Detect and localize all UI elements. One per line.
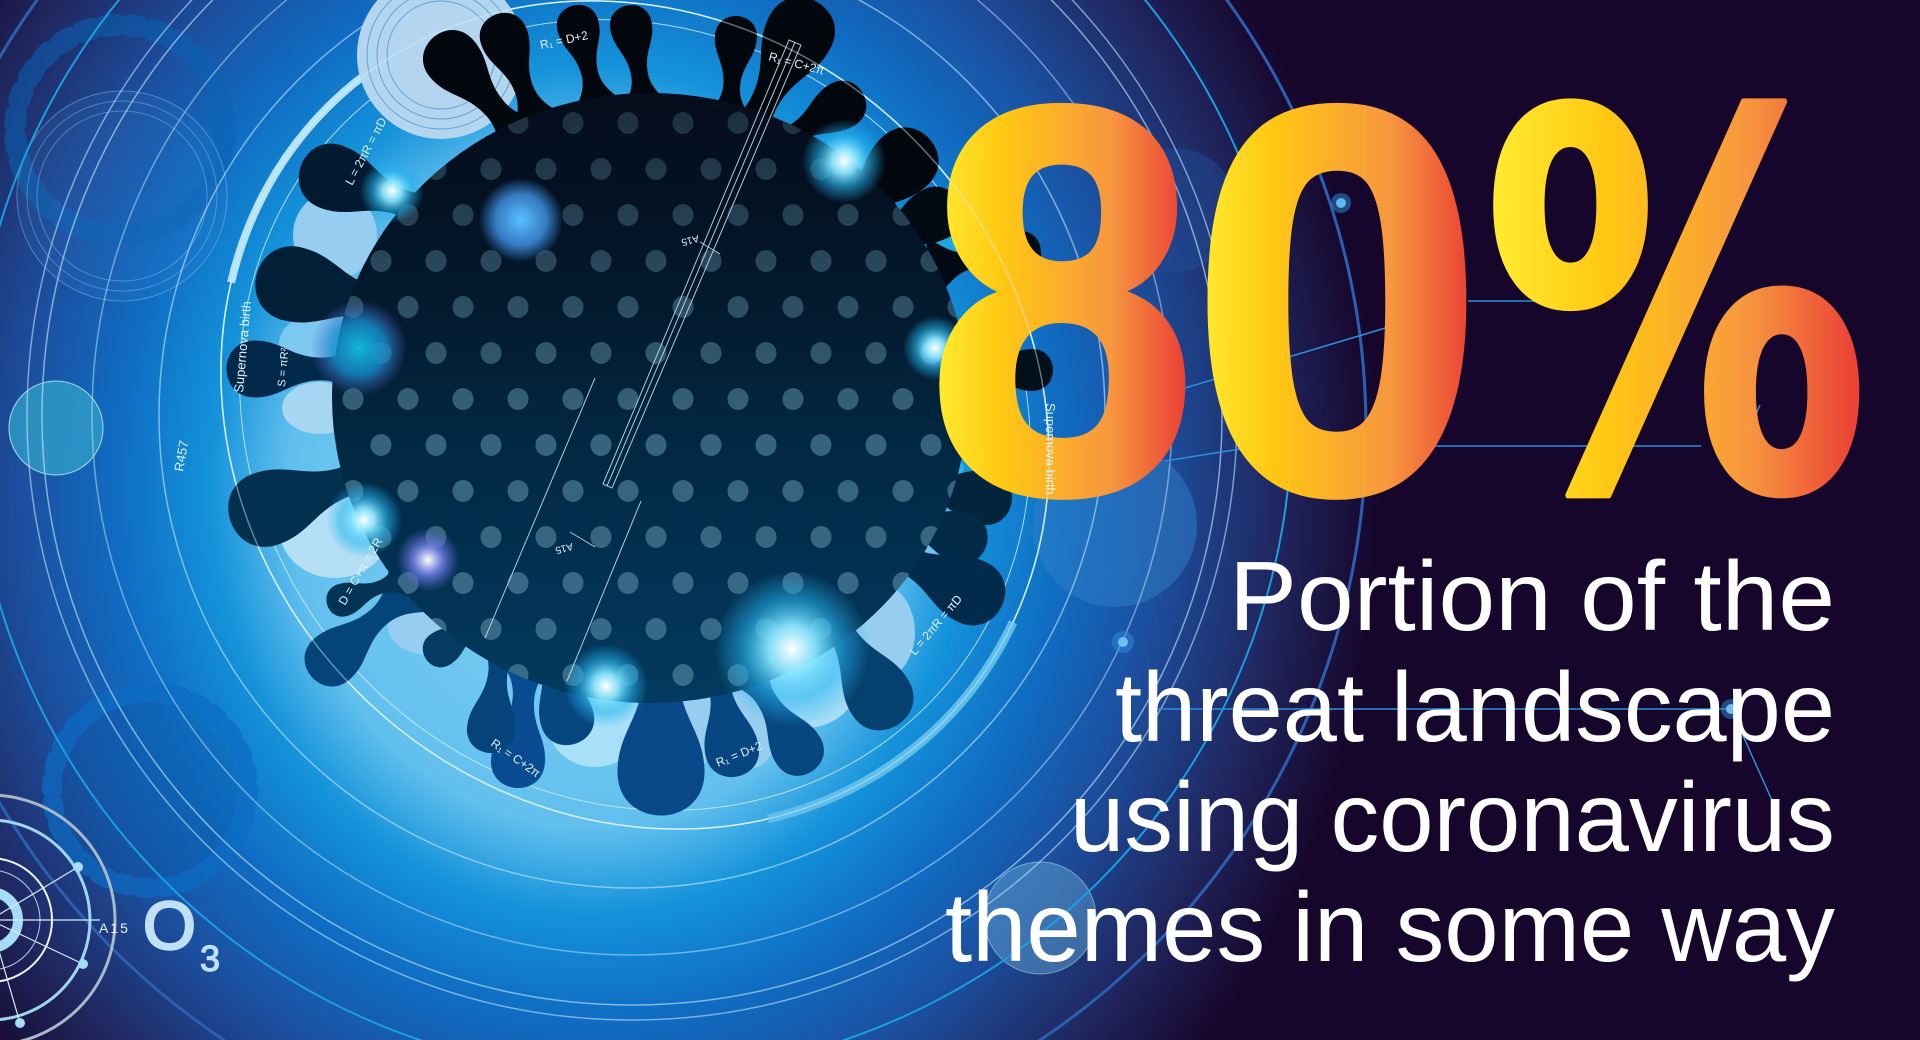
- description text: using coronavirus: [1070, 762, 1835, 872]
- diagonal measurement lines: [485, 40, 801, 681]
- virus body: [332, 93, 968, 703]
- ozone formula: 3: [200, 938, 220, 979]
- outer orbit rings: [0, 0, 1366, 1040]
- small technical labels: A15: [680, 232, 700, 247]
- ozone formula: [143, 888, 220, 979]
- faded virus: bottom left: [52, 692, 248, 888]
- big percentage figure: 0: [1191, 0, 1484, 606]
- small technical labels: R₁ = D+2: [714, 738, 765, 770]
- small technical labels: R₁ = C+2π: [767, 49, 826, 78]
- small technical labels: [171, 28, 965, 780]
- radar dial: bottom left: A15: [99, 920, 130, 936]
- small technical labels: L = 2πR = πD: [342, 115, 390, 187]
- big percentage figure: %: [1483, 6, 1869, 612]
- faded virus: top left: [15, 25, 225, 235]
- pale lined lobe: top left: [357, 0, 525, 139]
- lined disc: right: [1033, 148, 1237, 607]
- big percentage figure: 8: [928, 0, 1196, 607]
- description text: Portion of the: [1229, 541, 1835, 651]
- small technical labels: A15: [554, 540, 574, 555]
- big percentage figure: [928, 0, 1869, 612]
- description text: [945, 541, 1835, 982]
- light lobes between spikes: [279, 191, 976, 768]
- lined disc: upper left: [17, 91, 227, 301]
- ozone formula: O: [143, 888, 196, 964]
- top shading on the virus: [332, 93, 968, 703]
- description text: themes in some way: [945, 872, 1835, 982]
- small technical labels: R₁ = D+2: [539, 28, 590, 52]
- ring line and label over the figure: Supernova birth: [1043, 403, 1058, 495]
- small technical labels: L = 2πR = πD: [907, 592, 965, 658]
- small technical labels: R₁ = C+2π: [488, 736, 543, 780]
- glowing spots: [311, 119, 967, 728]
- description text: threat landscape: [1115, 652, 1835, 762]
- virus surface dots: [335, 112, 957, 686]
- radar dial: bottom left: [0, 795, 130, 1040]
- small technical labels: S = πR²: [276, 347, 291, 387]
- small technical labels: Supernova birth: [231, 301, 254, 393]
- lined ball: left: [9, 381, 103, 475]
- measurement ring: [50, 0, 1220, 1000]
- small technical labels: D = C+π = 2R: [335, 535, 385, 608]
- virus spikes: [212, 0, 1053, 815]
- thin connector lines and nodes: [1112, 193, 1775, 807]
- lined ball: bottom: [984, 862, 1096, 974]
- small technical labels: R457: [171, 439, 191, 473]
